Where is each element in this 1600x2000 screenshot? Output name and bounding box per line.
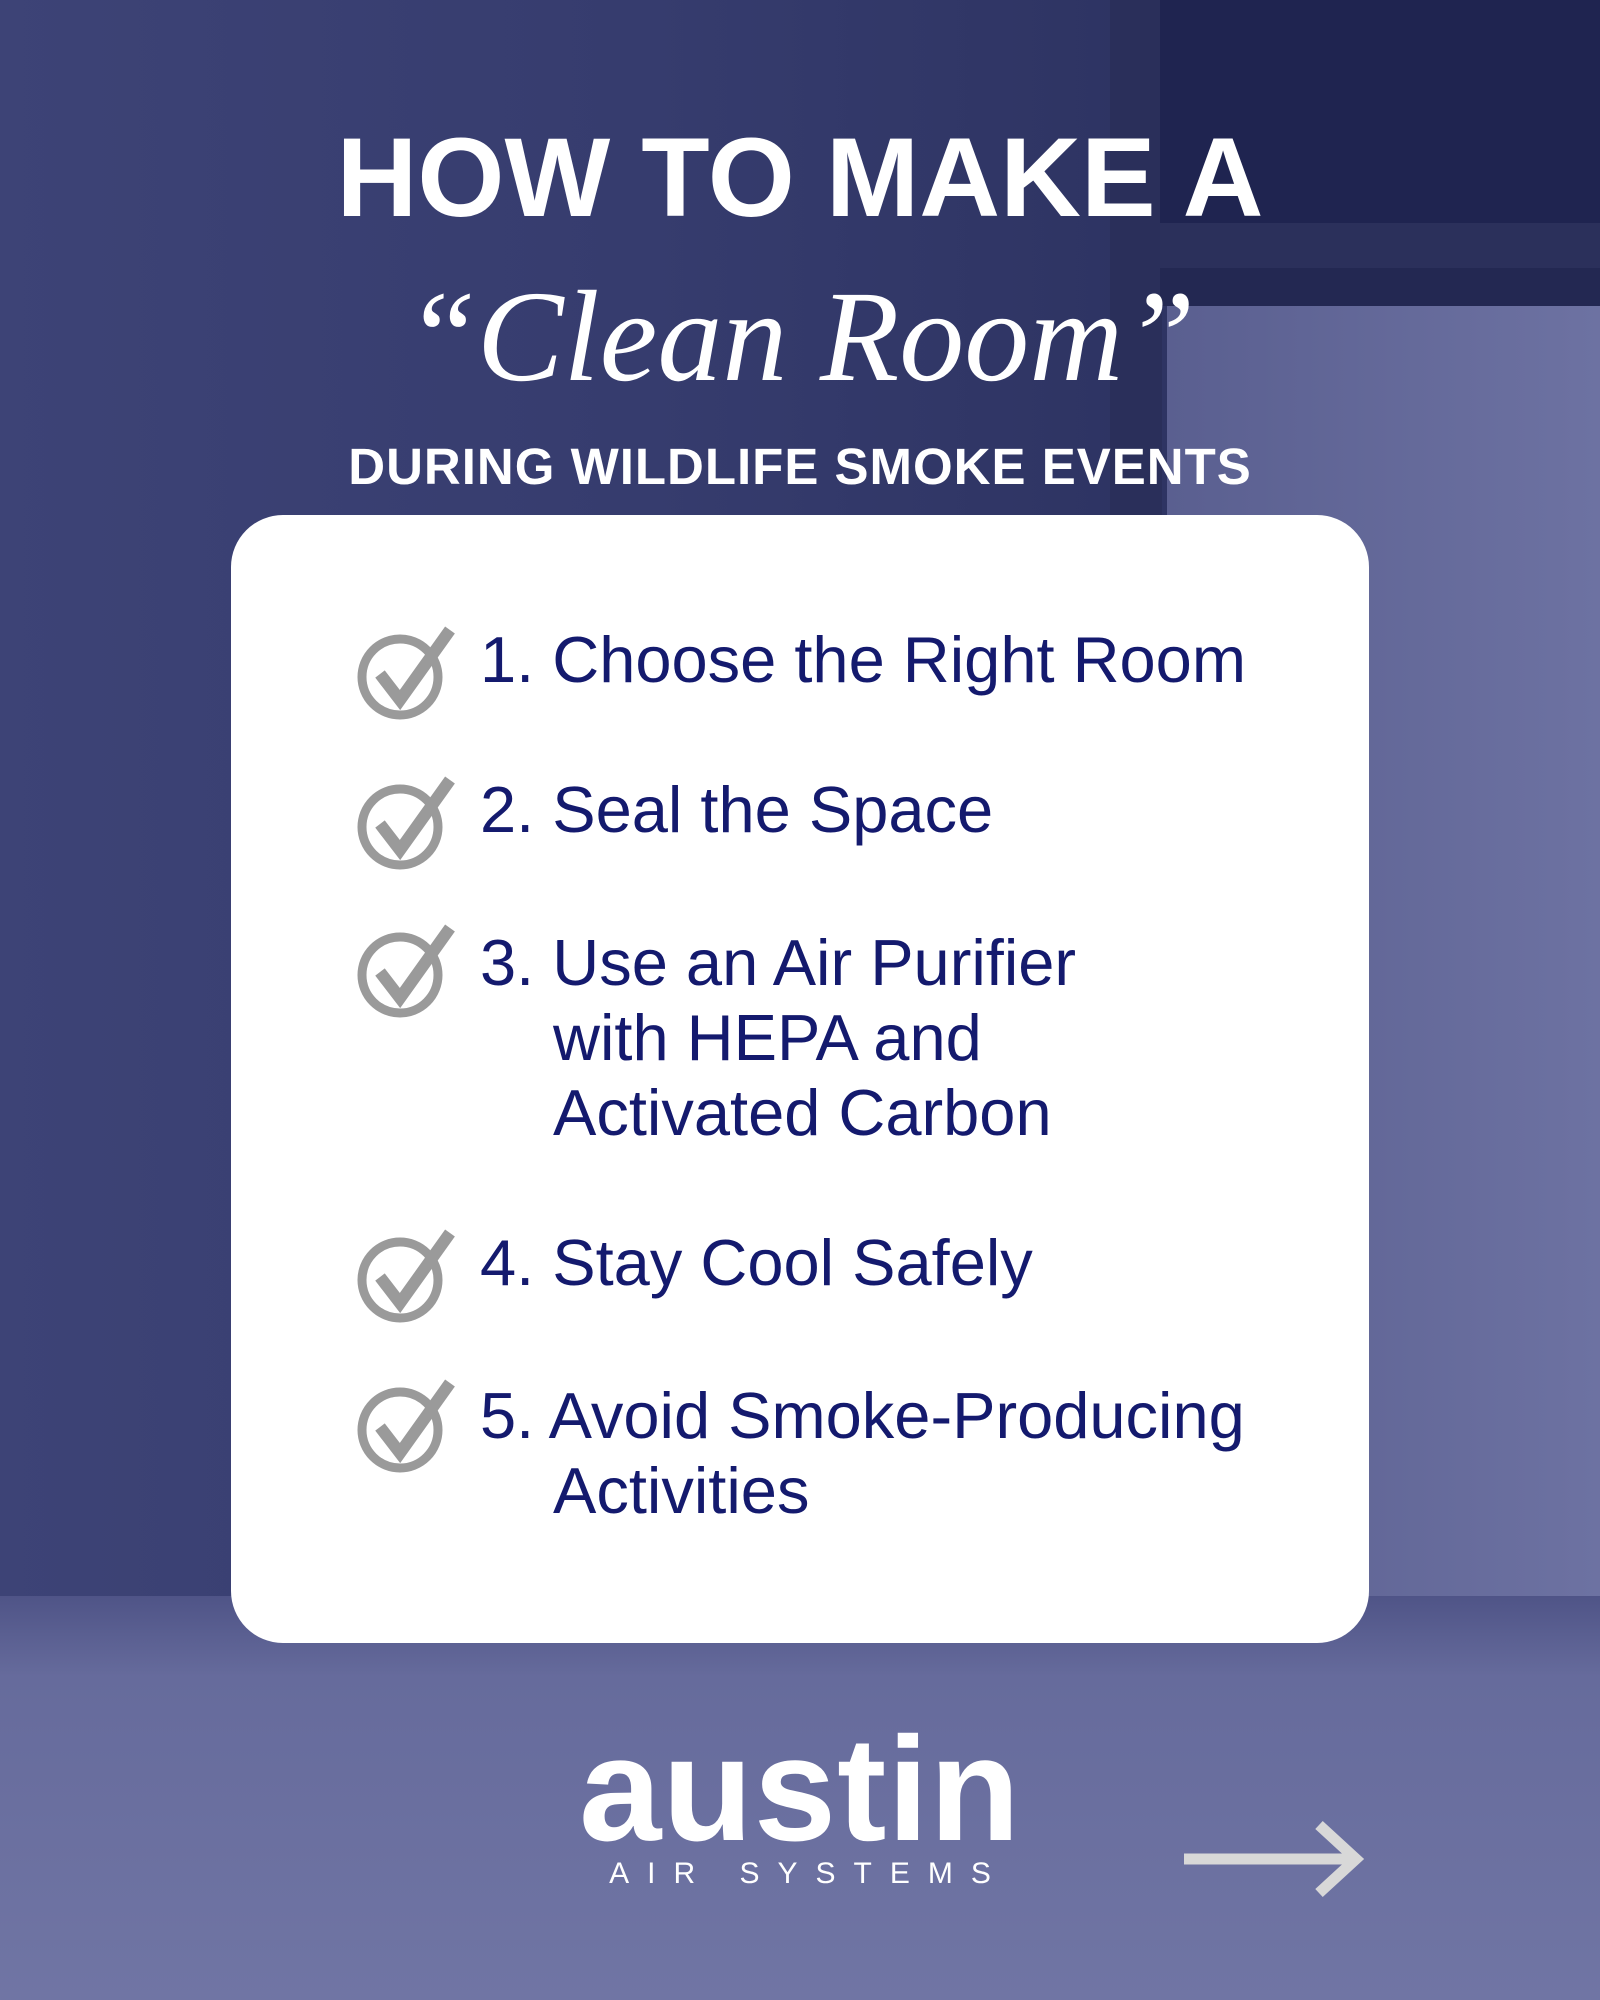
item 3: with HEPA and (553, 1001, 982, 1074)
background: right wall panel (1167, 306, 1600, 1596)
checklist icons (358, 626, 455, 1472)
item 5: Activities (553, 1454, 809, 1527)
title: HOW TO MAKE A (336, 115, 1264, 240)
item 2: 2. Seal the Space (480, 773, 993, 846)
panel: checklist card (231, 515, 1369, 1643)
item 4: 4. Stay Cool Safely (480, 1226, 1033, 1299)
item 3: Activated Carbon (553, 1076, 1052, 1149)
subtitle: DURING WILDLIFE SMOKE EVENTS (348, 438, 1252, 495)
icon: check 4 (358, 1230, 455, 1322)
item 5 (480, 1379, 1245, 1527)
icon: check 1 (358, 626, 455, 720)
item 3 (480, 926, 1076, 1149)
icon: check 3 (358, 924, 455, 1018)
icon: check 5 (358, 1380, 455, 1472)
logo: austin (579, 1707, 1021, 1872)
background: floor (0, 1596, 1600, 2000)
background: window frame (1110, 0, 1162, 515)
item 3: 3. Use an Air Purifier (480, 926, 1076, 999)
script title: Clean Room: “Clean Room” (405, 265, 1195, 409)
arrow (1184, 1821, 1364, 1897)
logo: AIR SYSTEMS (609, 1857, 1009, 1890)
item 1: 1. Choose the Right Room (480, 623, 1246, 696)
icon: check 2 (358, 776, 455, 870)
item 5: 5. Avoid Smoke-Producing (480, 1379, 1245, 1452)
